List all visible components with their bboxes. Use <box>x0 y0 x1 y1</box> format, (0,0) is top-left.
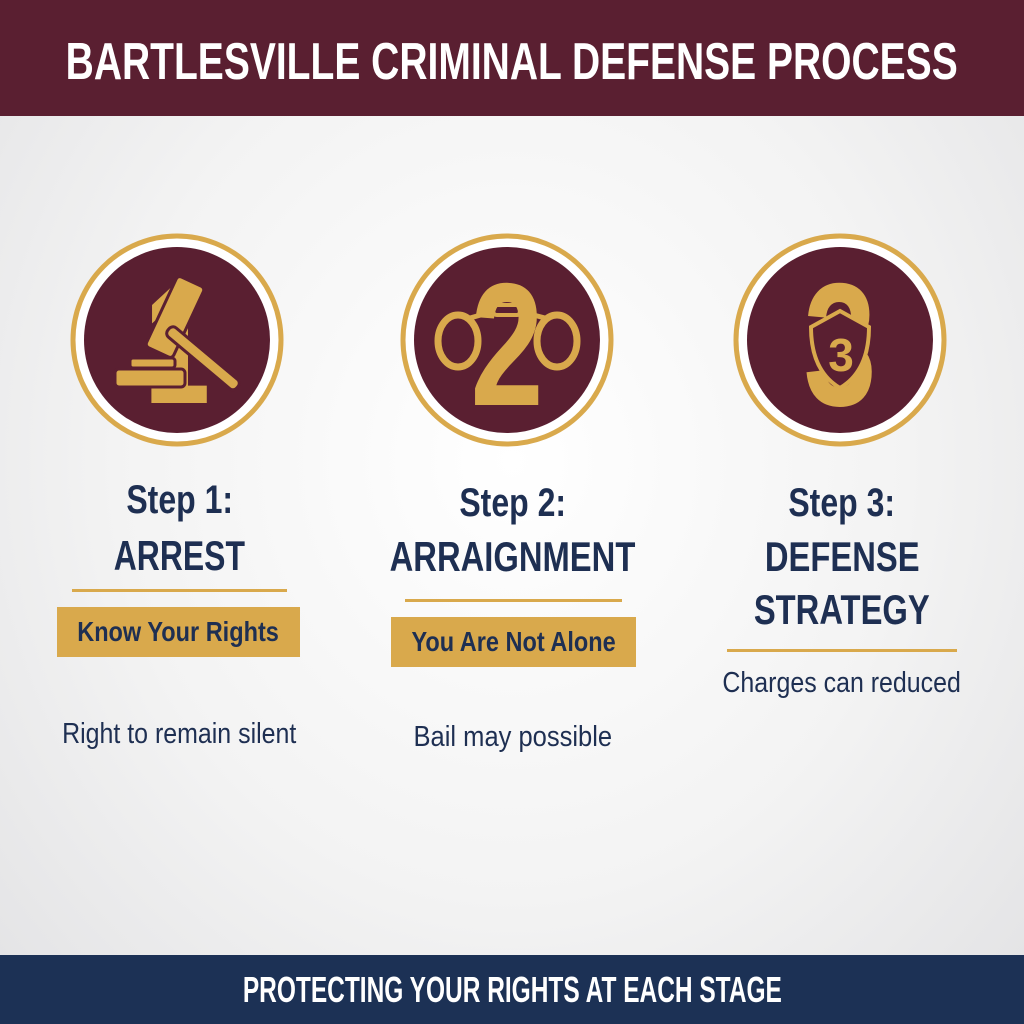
step 1 text: Know Your Rights <box>78 616 279 647</box>
step 3 text: DEFENSE <box>765 533 919 580</box>
description: Bail may possible <box>413 721 612 753</box>
step 1 text: ARREST <box>114 532 245 579</box>
step 3 text <box>723 481 961 699</box>
step 3 text: Step 3: <box>789 481 895 525</box>
step 1 text <box>57 478 300 750</box>
step 1 text: Step 1: <box>126 478 233 522</box>
title: BARTLESVILLE CRIMINAL DEFENSE PROCESS <box>66 33 958 91</box>
step 2 text: Step 2: <box>459 481 566 525</box>
icon: step 3 shield circle <box>734 234 946 446</box>
step 2 text: You Are Not Alone <box>411 626 616 657</box>
title bar <box>0 0 1024 116</box>
step 3 text: STRATEGY <box>754 586 930 633</box>
step 2 text: ARRAIGNMENT <box>390 533 635 580</box>
icon: step 2 handcuffs circle: 2 <box>471 247 543 442</box>
icon: step 3 shield circle: 3 <box>804 247 876 442</box>
icon: step 2 handcuffs circle <box>400 234 614 446</box>
footer bar: PROTECTING YOUR RIGHTS AT EACH STAGE <box>242 969 782 1010</box>
icon: step 1 gavel circle <box>70 234 284 446</box>
description: Charges can reduced <box>723 667 961 699</box>
icon: step 3 shield circle: 3 <box>828 329 854 381</box>
badge <box>57 607 300 657</box>
step 2 text <box>390 481 636 753</box>
description: Right to remain silent <box>62 718 297 750</box>
footer bar <box>0 955 1024 1024</box>
icon: step 1 gavel circle: 1 <box>144 250 210 440</box>
badge <box>391 617 636 667</box>
